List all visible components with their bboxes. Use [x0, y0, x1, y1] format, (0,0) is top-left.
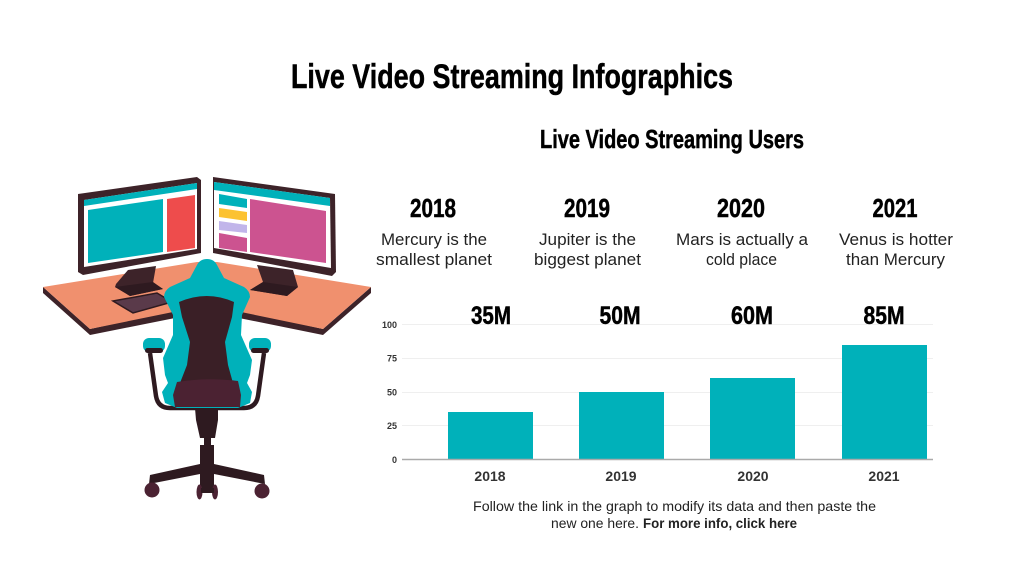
column: 2019	[534, 193, 641, 269]
y axis labels: 100	[382, 320, 397, 330]
column: 2020	[676, 193, 809, 269]
column: 2019: 2019	[564, 193, 610, 223]
value labels: 85M	[864, 302, 904, 330]
value labels: 35M	[471, 302, 511, 330]
column: 2020: Mars is actually a	[676, 231, 809, 249]
left monitor	[78, 177, 201, 296]
illustration: desk with monitors and chair	[43, 177, 371, 500]
y axis labels: 75	[387, 354, 397, 364]
y axis labels: 0	[392, 455, 397, 465]
column: 2018: smallest planet	[376, 251, 492, 269]
x axis labels: 2021	[868, 468, 900, 484]
subheading: users: Live Video Streaming Users	[540, 124, 804, 154]
footer note: Follow the link in the graph to modify its data and then paste the	[473, 498, 876, 514]
right monitor	[213, 177, 336, 296]
y axis labels: 25	[387, 421, 397, 431]
y axis labels	[382, 320, 397, 465]
footer note: new one here.	[551, 515, 639, 531]
column: 2021: Venus is hotter	[839, 231, 954, 249]
x axis labels	[474, 468, 900, 484]
column: 2020: 2020	[717, 193, 765, 223]
column: 2021: than Mercury	[846, 251, 946, 269]
x axis labels: 2020	[737, 468, 769, 484]
column: 2021	[839, 193, 954, 269]
chair	[143, 259, 271, 500]
value labels: 60M	[731, 302, 773, 330]
bars	[448, 345, 927, 459]
column: 2018: Mercury is the	[381, 231, 487, 249]
column: 2019: Jupiter is the	[539, 231, 636, 249]
x axis labels: 2018	[474, 468, 506, 484]
y axis labels: 50	[387, 388, 397, 398]
desk	[43, 262, 371, 335]
footer note: For more info, click here	[643, 515, 797, 531]
x axis labels: 2019	[605, 468, 637, 484]
column: 2020: cold place	[706, 251, 777, 269]
column: 2021: 2021	[872, 193, 918, 223]
bar chart	[382, 302, 933, 484]
keyboard	[113, 293, 172, 313]
value labels: 50M	[600, 302, 640, 330]
title: Live Video Streaming Infographics	[291, 58, 733, 96]
column: 2018: 2018	[410, 193, 456, 223]
column: 2018	[376, 193, 492, 269]
footer note	[473, 498, 876, 531]
column: 2019: biggest planet	[534, 251, 641, 269]
value labels	[471, 302, 904, 330]
